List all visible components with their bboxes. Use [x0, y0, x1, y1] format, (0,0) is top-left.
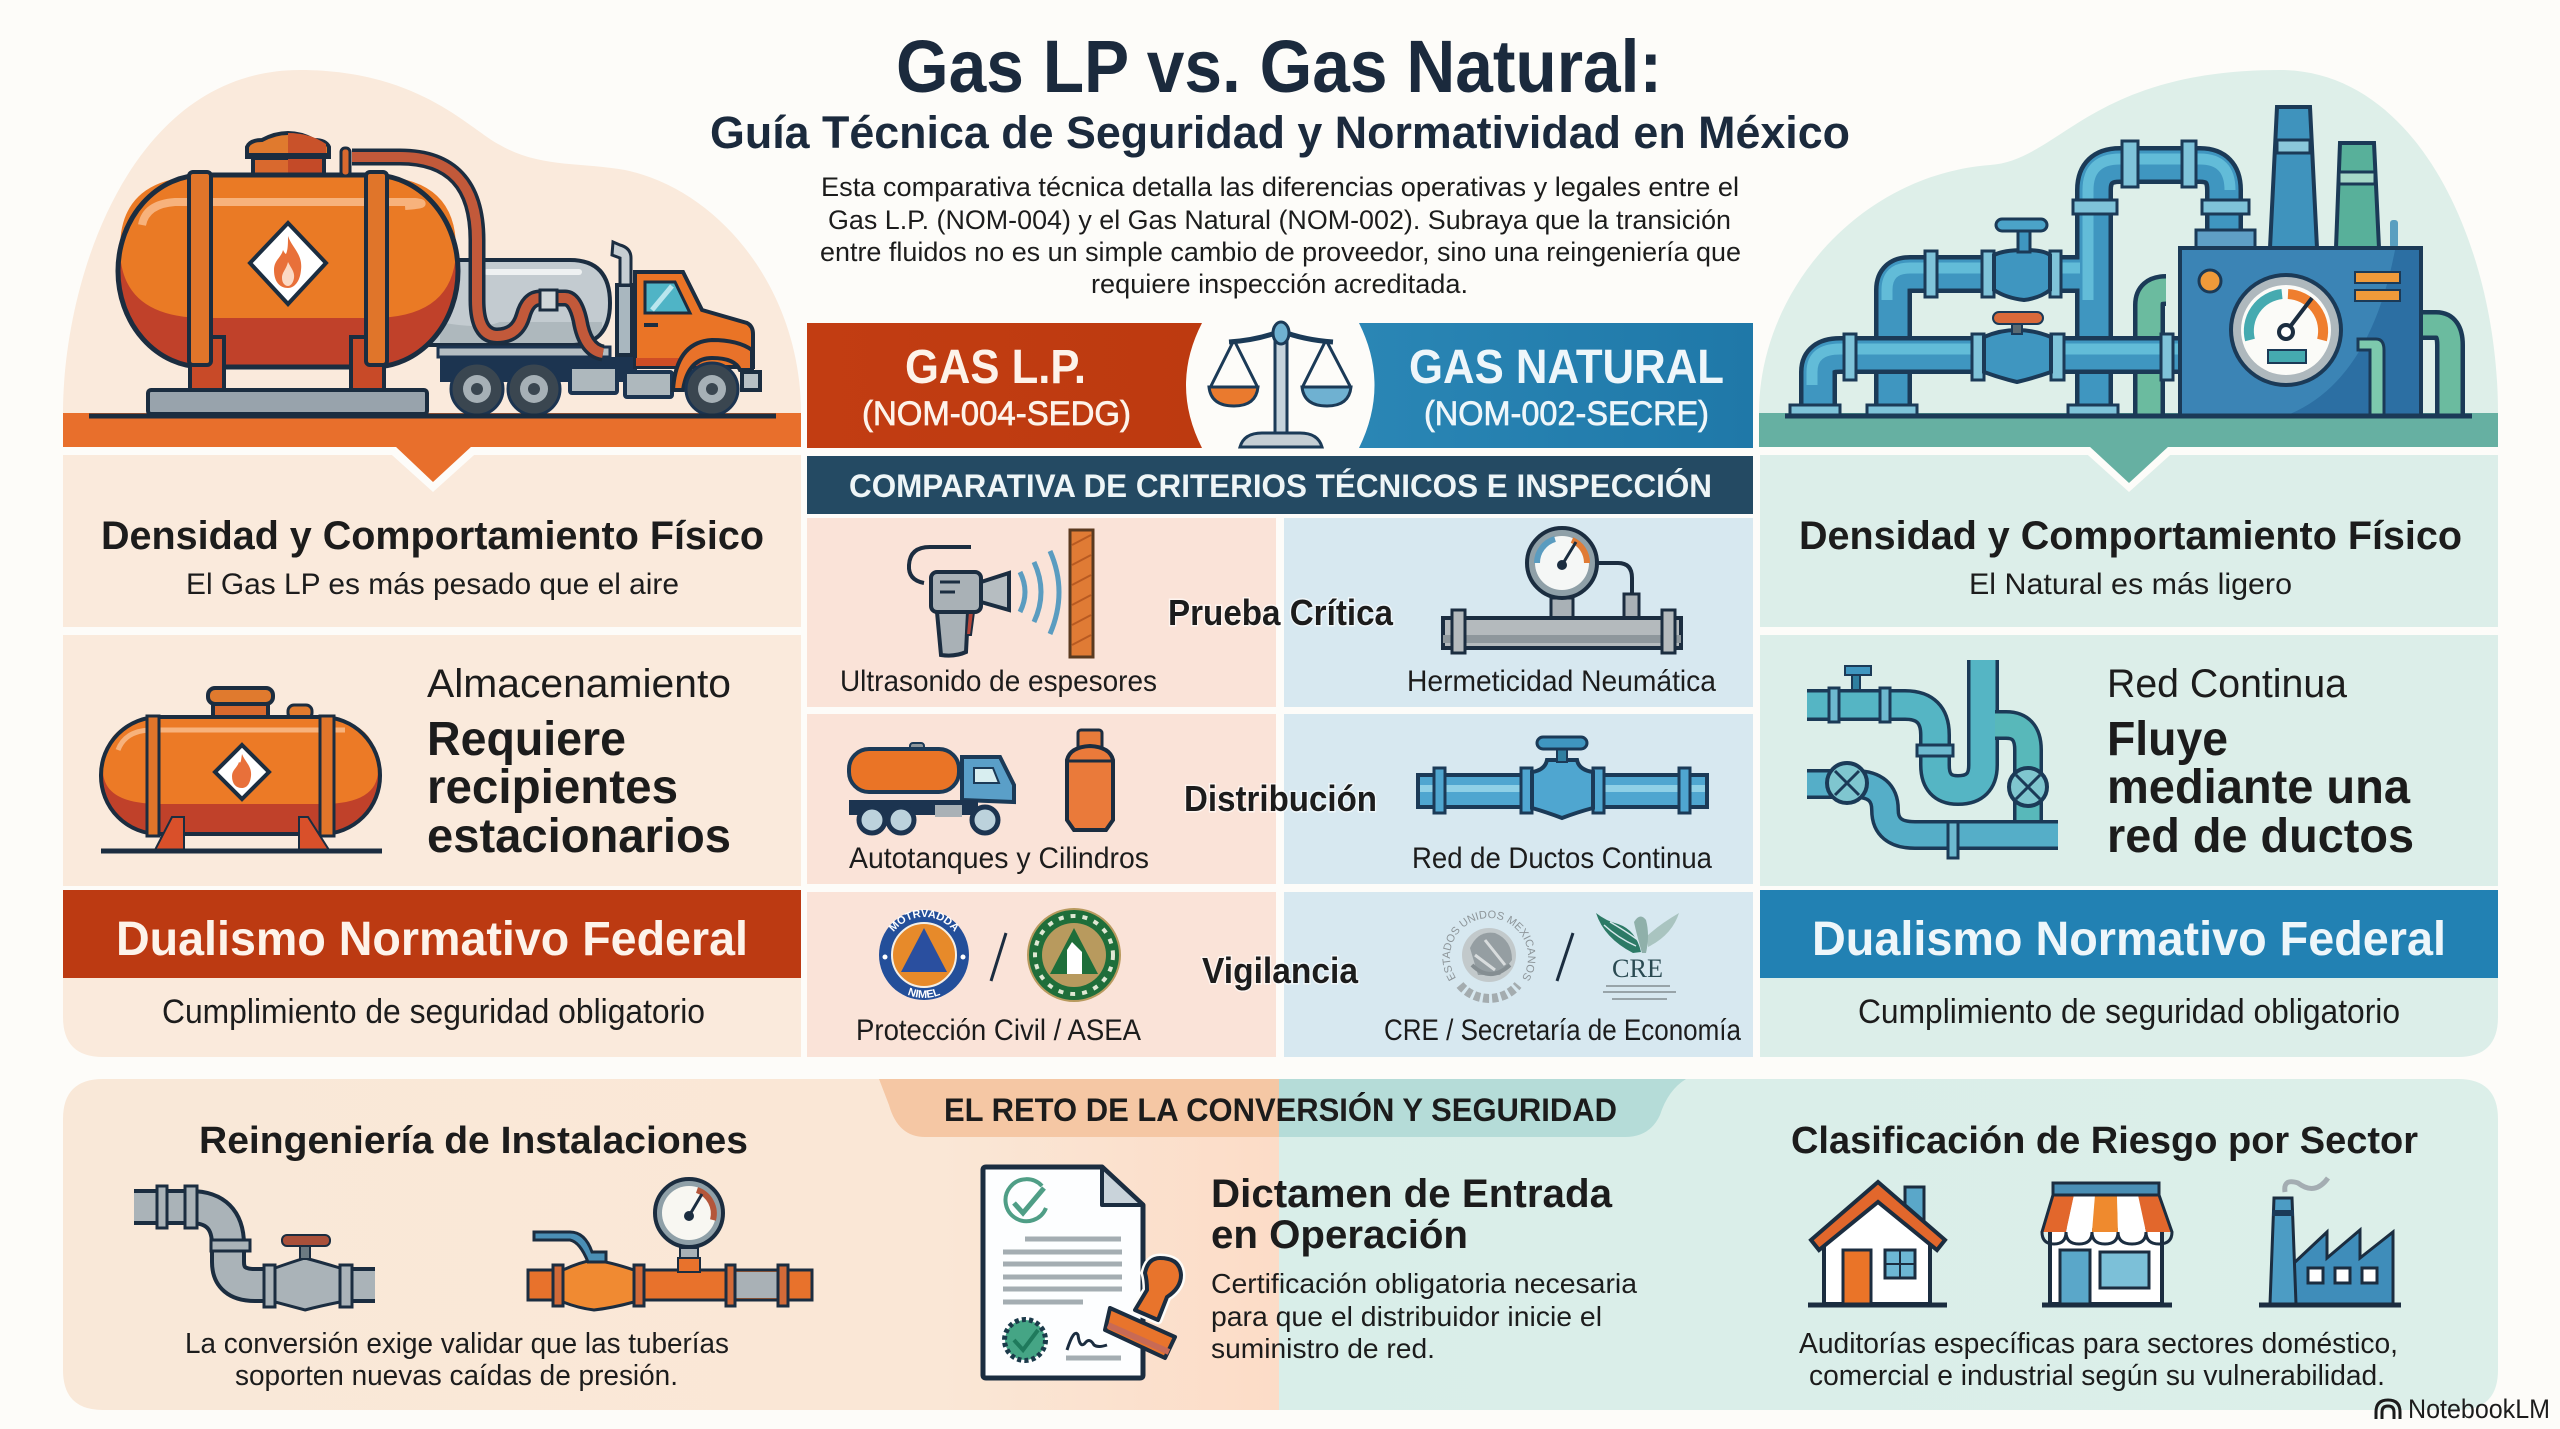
- logo: proteccion civil: NIMEL: [908, 988, 940, 998]
- logo: CRE: [1596, 913, 1679, 999]
- section bar: comparativa: [807, 456, 1753, 514]
- panel: right density: [1760, 446, 2498, 627]
- panel: right regulation: Cumplimiento de seguridad obligatorio: [1858, 993, 2400, 1031]
- panel: left storage: Requiere: [427, 713, 626, 766]
- panel: right density: Densidad y Comportamiento Físico: [1799, 514, 2462, 558]
- row: vigilancia: Protección Civil / ASEA: [856, 1014, 1141, 1047]
- block: dictamen: Dictamen de Entrada: [1211, 1172, 1613, 1216]
- block: clasificacion: [1791, 1120, 2418, 1392]
- panel: left storage: estacionarios: [427, 810, 731, 863]
- row: distribucion: Autotanques y Cilindros: [849, 842, 1149, 875]
- row: vigilancia: [856, 908, 1741, 1047]
- icon: certified document with stamp: [983, 1167, 1181, 1378]
- logo: CRE: CRE: [1612, 954, 1663, 983]
- row: prueba critica: Hermeticidad Neumática: [1407, 665, 1716, 698]
- panel: right density: El Natural es más ligero: [1969, 568, 2292, 601]
- intro paragraph: Gas L.P. (NOM-004) y el Gas Natural (NOM-002). Subraya que la transición: [828, 205, 1731, 235]
- row: vigilancia: Vigilancia: [1202, 950, 1359, 991]
- header: Gas L.P.: GAS L.P.: [905, 341, 1086, 394]
- row: prueba critica: [840, 528, 1716, 698]
- row: distribucion: Distribución: [1184, 778, 1377, 819]
- row: prueba critica: Ultrasonido de espesores: [840, 665, 1157, 698]
- panel: left storage: [63, 635, 801, 886]
- logo: proteccion civil: [879, 909, 969, 1000]
- block: dictamen: [983, 1167, 1637, 1378]
- block: clasificacion: comercial e industrial según su vulnerabilidad.: [1809, 1360, 2385, 1392]
- panel: left density: El Gas LP es más pesado que el aire: [186, 568, 679, 601]
- panel: left storage: Almacenamiento: [427, 662, 731, 706]
- subtitle: Guía Técnica de Seguridad y Normatividad en México: [710, 107, 1850, 158]
- header: Gas Natural: GAS NATURAL: [1409, 341, 1724, 394]
- panel: left regulation: Cumplimiento de seguridad obligatorio: [162, 993, 705, 1031]
- row: distribucion: [849, 730, 1712, 875]
- intro paragraph: entre fluidos no es un simple cambio de proveedor, sino una reingeniería que: [820, 237, 1741, 267]
- intro paragraph: [820, 172, 1741, 299]
- icon: tanker truck: [849, 743, 1014, 833]
- icon: gas cylinder: [1067, 730, 1113, 830]
- panel: right network: red de ductos: [2107, 810, 2414, 863]
- icon: ultrasound gun: [909, 530, 1093, 657]
- logo: proteccion civil: MOTRVADDA: [888, 909, 958, 932]
- icon: storage tank: [101, 688, 382, 851]
- block: reingenieria: La conversión exige validar que las tuberías: [185, 1328, 729, 1360]
- icon: factory: [2259, 1178, 2401, 1305]
- panel: right regulation: Dualismo Normativo Federal: [1812, 913, 2446, 966]
- panel: left density: Densidad y Comportamiento Físico: [101, 514, 764, 558]
- illustration: pipes and gauge station: [1785, 107, 2472, 416]
- panel: right network: [1760, 635, 2498, 886]
- block: reingenieria: soporten nuevas caídas de presión.: [235, 1360, 678, 1392]
- header: Gas L.P.: (NOM-004-SEDG): [862, 395, 1131, 433]
- icon: duct with valve: [1418, 737, 1707, 818]
- intro paragraph: Esta comparativa técnica detalla las diferencias operativas y legales entre el: [821, 172, 1739, 202]
- watermark: NotebookLM: NotebookLM: [2408, 1394, 2550, 1424]
- block: dictamen: suministro de red.: [1211, 1333, 1435, 1364]
- panel: Gas LP hero: [63, 70, 801, 447]
- panel: conversion and safety: [63, 1079, 2498, 1410]
- title: Gas LP vs. Gas Natural:: [896, 25, 1662, 108]
- row: distribucion: Red de Ductos Continua: [1412, 842, 1712, 875]
- block: dictamen: para que el distribuidor inicie el: [1211, 1301, 1602, 1332]
- illustration: tank and truck: [89, 133, 776, 416]
- icon: orange pipe with gauge: [528, 1179, 812, 1310]
- heading tab: [879, 1079, 1686, 1137]
- icon: pressure gauge on pipe: [1443, 528, 1681, 653]
- block: clasificacion: Auditorías específicas para sectores doméstico,: [1799, 1328, 2398, 1360]
- panel: Gas Natural hero: [1759, 70, 2498, 447]
- header: Gas Natural: (NOM-002-SECRE): [1424, 395, 1709, 433]
- icon: gray pipe: [134, 1186, 375, 1310]
- panel: right network: mediante una: [2107, 761, 2410, 814]
- block: clasificacion: Clasificación de Riesgo por Sector: [1791, 1120, 2418, 1162]
- block: dictamen: en Operación: [1211, 1213, 1468, 1257]
- logo: mexican seal: ESTADOS UNIDOS MEXICANOS: [1442, 910, 1536, 981]
- intro paragraph: requiere inspección acreditada.: [1091, 269, 1468, 299]
- panel: left storage: recipientes: [427, 761, 678, 814]
- icon: balance scale: [1209, 322, 1351, 447]
- panel: left density: [63, 446, 801, 627]
- block: reingenieria: Reingeniería de Instalaciones: [199, 1120, 748, 1162]
- header: Gas L.P.: [807, 323, 1202, 448]
- section bar: comparativa: COMPARATIVA DE CRITERIOS TÉCNICOS E INSPECCIÓN: [849, 468, 1712, 504]
- panel: left regulation: [63, 890, 801, 1057]
- row: vigilancia: CRE / Secretaría de Economía: [1384, 1014, 1741, 1047]
- header: Gas Natural: [1359, 323, 1753, 448]
- panel: right regulation: [1760, 890, 2498, 1057]
- panel: right network: Fluye: [2107, 713, 2228, 766]
- panel: right network: Red Continua: [2107, 662, 2348, 706]
- panel: left regulation: Dualismo Normativo Federal: [116, 913, 748, 966]
- logo: ASEA: [1028, 909, 1120, 1001]
- block: dictamen: Certificación obligatoria necesaria: [1211, 1268, 1637, 1299]
- icon: pipe network: [1807, 660, 2058, 858]
- block: reingenieria: [134, 1120, 812, 1392]
- row: prueba critica: Prueba Crítica: [1168, 592, 1394, 633]
- comparison cells backgrounds: [807, 518, 1753, 1057]
- icon: store: [2042, 1183, 2172, 1305]
- icon: house: [1808, 1182, 1947, 1305]
- heading tab: EL RETO DE LA CONVERSIÓN Y SEGURIDAD: [944, 1092, 1617, 1128]
